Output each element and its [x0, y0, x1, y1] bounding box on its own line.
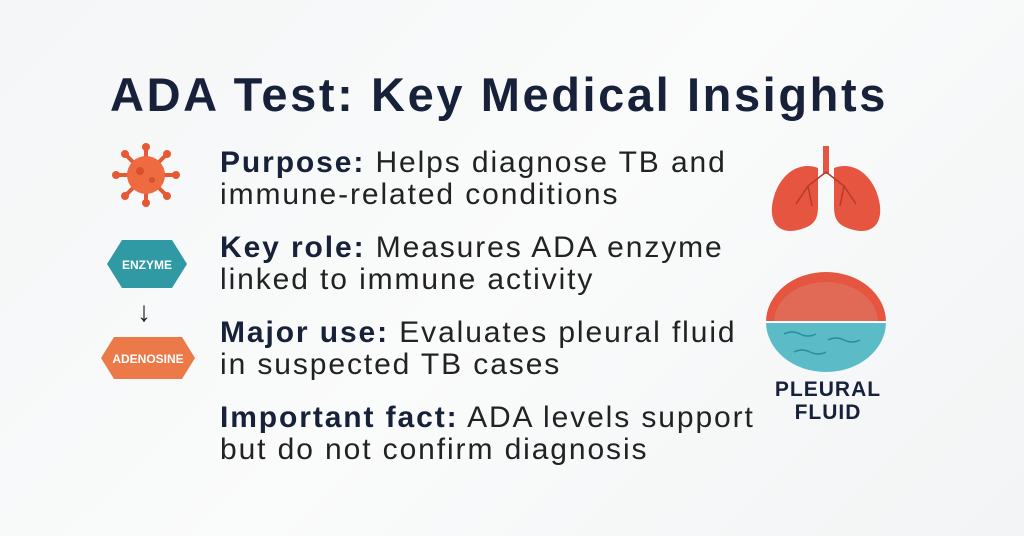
text: key role: Key role: Measures ADA enzyme	[220, 231, 724, 264]
label: pleural fluid: PLEURAL	[775, 378, 881, 401]
arrow: ↓	[137, 296, 151, 327]
text: purpose	[220, 146, 727, 211]
text: purpose: Purpose: Helps diagnose TB and	[220, 146, 727, 179]
text: important fact: but do not confirm diagnosis	[220, 433, 648, 466]
text: purpose: immune-related conditions	[220, 178, 619, 211]
text: important fact: Important fact: ADA levels support	[220, 401, 755, 434]
icon: adenosine hexagon: ADENOSINE	[112, 352, 184, 366]
icon: pleural fluid	[766, 272, 886, 372]
icon: enzyme hexagon	[107, 240, 187, 288]
text: major use: Major use: Evaluates pleural fluid	[220, 316, 736, 349]
text: key role	[220, 231, 724, 296]
icon: lungs	[772, 146, 880, 231]
icon: virus	[112, 143, 180, 207]
label: pleural fluid: FLUID	[795, 401, 861, 424]
icon: enzyme hexagon: ENZYME	[122, 258, 172, 272]
label: pleural fluid	[775, 378, 881, 424]
text: major use: in suspected TB cases	[220, 348, 561, 381]
title: ADA Test: Key Medical Insights	[110, 68, 888, 121]
text: major use	[220, 316, 736, 381]
text: key role: linked to immune activity	[220, 263, 594, 296]
icon: adenosine hexagon	[101, 337, 195, 379]
text: important fact	[220, 401, 755, 466]
